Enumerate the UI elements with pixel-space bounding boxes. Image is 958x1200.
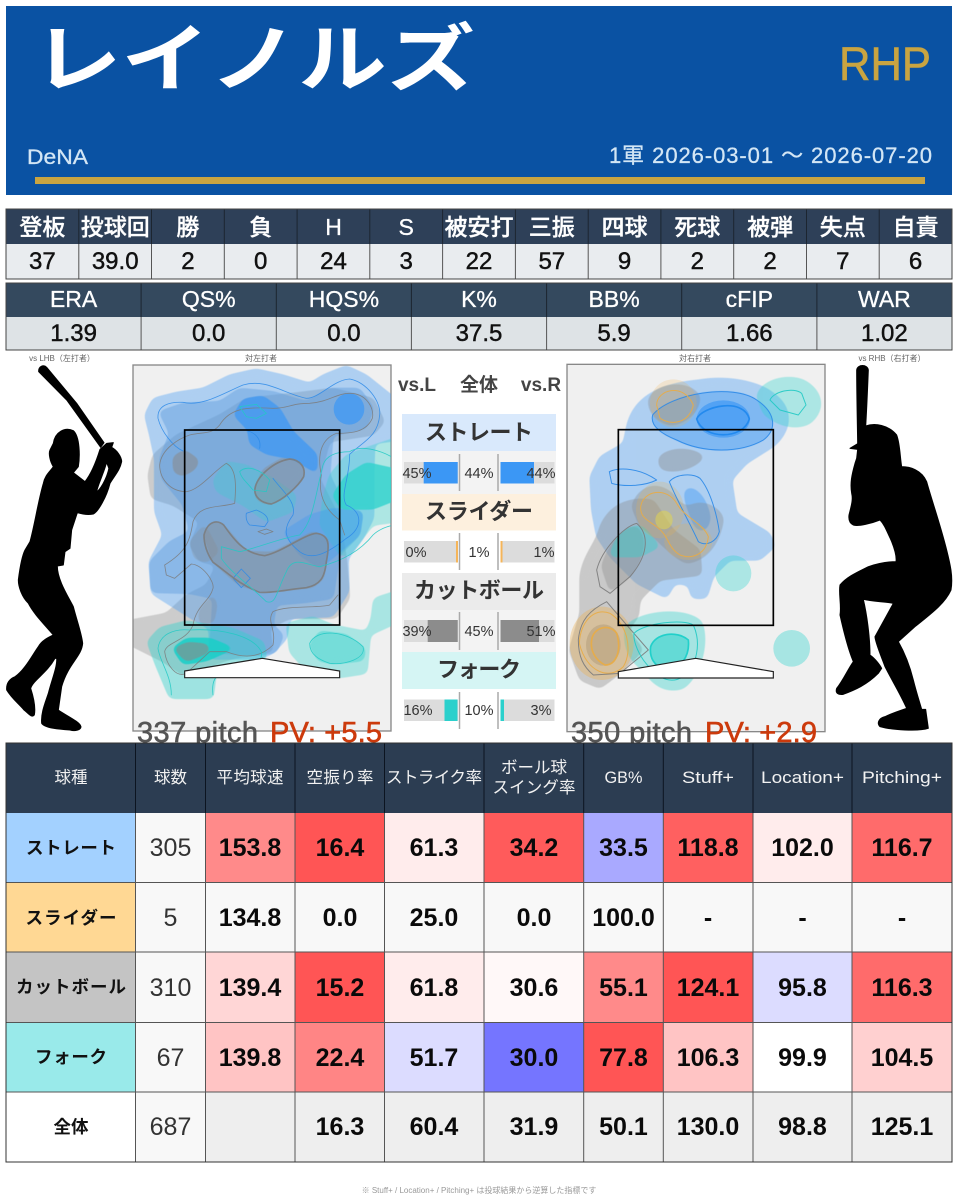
table row: total: 50.1 xyxy=(599,1113,648,1141)
table header row: GB% xyxy=(604,769,643,787)
stats table: rate stats: HQS% xyxy=(309,286,379,312)
stats table: counting stats: 2 xyxy=(763,248,777,275)
table row: fork: 106.3 xyxy=(677,1044,739,1072)
stats table: counting stats: 2 xyxy=(181,248,195,275)
caption: right map: 対右打者 xyxy=(679,353,711,363)
stats table: rate stats: ERA xyxy=(50,286,98,312)
table row: fork: 67 xyxy=(157,1044,184,1072)
footnote: ※ Stuff+ / Location+ / Pitching+ は投球結果から逆算した指標です xyxy=(362,1185,596,1195)
stats table: counting stats: 自責 xyxy=(893,214,939,240)
table header row: ストライク率 xyxy=(386,768,482,787)
table row: straight: 118.8 xyxy=(677,834,739,862)
caption: vs LHB: vs LHB（左打者） xyxy=(29,353,95,363)
table row: slider: 25.0 xyxy=(410,904,458,932)
panel: left heat map xyxy=(123,365,400,731)
stats table: counting stats: 被弾 xyxy=(747,214,793,240)
table row: total xyxy=(6,1092,952,1162)
label: right pitch count: 350 pitch xyxy=(571,717,692,749)
column headings xyxy=(398,374,561,396)
table row: fork: 99.9 xyxy=(778,1044,827,1072)
row: fork: 3% xyxy=(531,703,552,719)
table row: cut ball: 310 xyxy=(150,974,191,1002)
row: straight: 44% xyxy=(464,466,494,482)
label: left pitch value: PV: +5.5 xyxy=(270,717,382,749)
stats table: rate stats: QS% xyxy=(182,286,236,312)
date range: 1軍 2026-03-01 〜 2026-07-20 xyxy=(609,143,932,168)
stats table: rate stats: 0.0 xyxy=(192,320,225,347)
stats table: counting stats: 57 xyxy=(538,248,565,275)
stats table: counting stats: 勝 xyxy=(176,214,199,240)
label: left pitch count: 337 pitch xyxy=(137,717,258,749)
stats table: counting stats: S xyxy=(399,214,414,240)
stats table: counting stats: 登板 xyxy=(19,214,65,240)
caption: vs RHB: vs RHB（右打者） xyxy=(858,353,926,363)
stats table: counting stats: 負 xyxy=(249,214,272,240)
stats table: counting stats: 投球回 xyxy=(81,214,150,240)
stats table: counting stats: 2 xyxy=(691,248,704,275)
row: slider: スライダー xyxy=(425,499,533,524)
table row: cut ball: 61.8 xyxy=(410,974,458,1002)
table header row: ボール球 xyxy=(501,758,568,777)
table row: slider: 0.0 xyxy=(517,904,551,932)
table header row: Pitching+ xyxy=(862,769,942,787)
row: fork: 16% xyxy=(403,703,433,719)
table row: cut ball: 139.4 xyxy=(219,974,281,1002)
table row: straight: 61.3 xyxy=(410,834,458,862)
stats table: counting stats: 37 xyxy=(29,248,56,275)
stats table: counting stats: 3 xyxy=(400,248,413,275)
stats table: counting stats: 被安打 xyxy=(444,214,514,240)
teal spots xyxy=(715,555,810,667)
table row: fork: 77.8 xyxy=(599,1044,648,1072)
icon: left-handed batter silhouette xyxy=(7,366,122,731)
label: right pitch value: PV: +2.9 xyxy=(705,717,817,749)
table row: slider xyxy=(6,882,952,952)
row: fork xyxy=(402,652,556,729)
row: slider: 0% xyxy=(406,545,427,561)
row: cut ball: 51% xyxy=(526,624,556,640)
contour lines xyxy=(158,379,400,695)
table row: slider: スライダー xyxy=(26,908,116,928)
table row: cut ball: 95.8 xyxy=(778,974,827,1002)
row: slider: 1% xyxy=(469,545,490,561)
table header row: 平均球速 xyxy=(216,768,284,787)
table row: total: 687 xyxy=(150,1113,191,1141)
home plate xyxy=(185,658,340,678)
table row: straight: 153.8 xyxy=(219,834,281,862)
row: cut ball: 39% xyxy=(402,624,432,640)
panel: right heat map xyxy=(567,364,825,732)
row: straight xyxy=(402,414,556,494)
player name: レイノルズ xyxy=(33,18,475,101)
table header row xyxy=(6,743,952,813)
icon: right-handed batter silhouette xyxy=(836,365,952,730)
strike zone xyxy=(618,430,773,625)
table row: fork: 104.5 xyxy=(871,1044,933,1072)
density layers xyxy=(569,377,821,690)
table row: fork: フォーク xyxy=(35,1047,107,1067)
table row: fork: 139.8 xyxy=(219,1044,281,1072)
table row: slider: 0.0 xyxy=(323,904,357,932)
table row: cut ball: 30.6 xyxy=(510,974,558,1002)
table row: cut ball: 15.2 xyxy=(316,974,364,1002)
stats table: rate stats: 1.66 xyxy=(726,320,773,347)
column headings: 全体 xyxy=(460,374,498,396)
team name: DeNA xyxy=(27,146,88,169)
header banner xyxy=(6,6,952,195)
stats table: rate stats: 37.5 xyxy=(456,320,502,347)
table row: fork: 22.4 xyxy=(316,1044,364,1072)
stats table: counting stats: 9 xyxy=(618,248,631,275)
handedness: RHP xyxy=(839,37,931,90)
table row: fork: 51.7 xyxy=(410,1044,458,1072)
table row: straight xyxy=(6,813,952,882)
table row: slider: 5 xyxy=(164,904,177,932)
table header row: 球数 xyxy=(154,768,187,787)
table row: total: 16.3 xyxy=(316,1113,364,1141)
table row: total: 125.1 xyxy=(871,1113,933,1141)
home plate xyxy=(618,658,773,678)
table row: straight: 305 xyxy=(150,834,191,862)
stats table: counting stats: 0 xyxy=(254,248,267,275)
stats table: counting stats: 四球 xyxy=(602,214,648,240)
pitch metrics table xyxy=(6,743,952,1162)
row: slider: 1% xyxy=(534,545,555,561)
contour lines xyxy=(578,390,806,680)
table row: straight: 33.5 xyxy=(599,834,648,862)
stats table: counting stats: 24 xyxy=(320,248,347,275)
row: straight: 44% xyxy=(526,466,556,482)
stats table: rate stats: K% xyxy=(461,286,497,312)
stats table: counting stats: 39.0 xyxy=(92,248,139,275)
density layers xyxy=(123,366,400,698)
stats table: counting stats: 三振 xyxy=(529,214,575,240)
stats table: counting stats: 7 xyxy=(836,248,849,275)
row: fork: フォーク xyxy=(437,657,521,682)
row: cut ball: カットボール xyxy=(414,578,544,603)
table row: total: 60.4 xyxy=(410,1113,458,1141)
column headings: vs.L xyxy=(398,375,436,396)
table row: cut ball: カットボール xyxy=(16,977,126,997)
table row: straight: 16.4 xyxy=(316,834,364,862)
row: fork: 10% xyxy=(464,703,494,719)
table row: straight: 102.0 xyxy=(771,834,834,862)
table row: straight: 34.2 xyxy=(510,834,558,862)
orange density: スライダー xyxy=(570,379,712,680)
caption: left map: 対左打者 xyxy=(245,353,277,363)
row: slider xyxy=(402,494,556,570)
table row: slider: - xyxy=(704,904,712,932)
stats table: counting stats: 6 xyxy=(909,248,922,275)
strike zone xyxy=(185,430,340,625)
table header row: Stuff+ xyxy=(682,769,734,787)
stats table: rate stats xyxy=(6,283,952,350)
stats table: rate stats: cFIP xyxy=(726,286,773,312)
stats table: rate stats: 5.9 xyxy=(597,320,631,347)
table row: total: 全体 xyxy=(54,1117,89,1137)
gold rule xyxy=(35,177,925,184)
stats table: counting stats: 失点 xyxy=(820,214,866,240)
table row: cut ball: 124.1 xyxy=(677,974,739,1002)
table header row: 空振り率 xyxy=(306,768,374,787)
table row: slider: 100.0 xyxy=(592,904,655,932)
stats table: counting stats: 22 xyxy=(466,248,492,275)
stats table: rate stats: 0.0 xyxy=(327,320,361,347)
table row: cut ball: 55.1 xyxy=(599,974,648,1002)
table row: slider: - xyxy=(798,904,807,932)
column headings: vs.R xyxy=(521,375,561,396)
table row: slider: - xyxy=(898,904,906,932)
table row: total: 31.9 xyxy=(510,1113,558,1141)
table row: fork xyxy=(6,1022,952,1092)
stats table: rate stats: 1.39 xyxy=(50,320,97,347)
stats table: rate stats: 1.02 xyxy=(861,320,908,347)
stats table: rate stats: WAR xyxy=(858,286,911,312)
stats table: rate stats: BB% xyxy=(589,286,640,312)
table header row: 球種 xyxy=(54,768,88,787)
stats table: counting stats xyxy=(6,209,952,279)
row: straight: 45% xyxy=(402,466,432,482)
row: straight: ストレート xyxy=(425,420,533,445)
stats table: counting stats: H xyxy=(325,214,342,240)
table row: straight: 116.7 xyxy=(871,834,933,862)
table row: straight: ストレート xyxy=(26,838,116,858)
table row: total: 130.0 xyxy=(677,1113,739,1141)
table header row: スイング率 xyxy=(492,778,576,797)
table row: slider: 134.8 xyxy=(219,904,281,932)
stats table: counting stats: 死球 xyxy=(674,214,720,240)
table row: fork: 30.0 xyxy=(510,1044,558,1072)
table row: cut ball xyxy=(6,952,952,1022)
row: cut ball: 45% xyxy=(464,624,494,640)
table row: cut ball: 116.3 xyxy=(871,974,933,1002)
panel: pitch mix comparison xyxy=(398,374,561,729)
table row: total: 98.8 xyxy=(778,1113,827,1141)
table header row: Location+ xyxy=(761,769,844,787)
row: cut ball xyxy=(402,573,556,652)
